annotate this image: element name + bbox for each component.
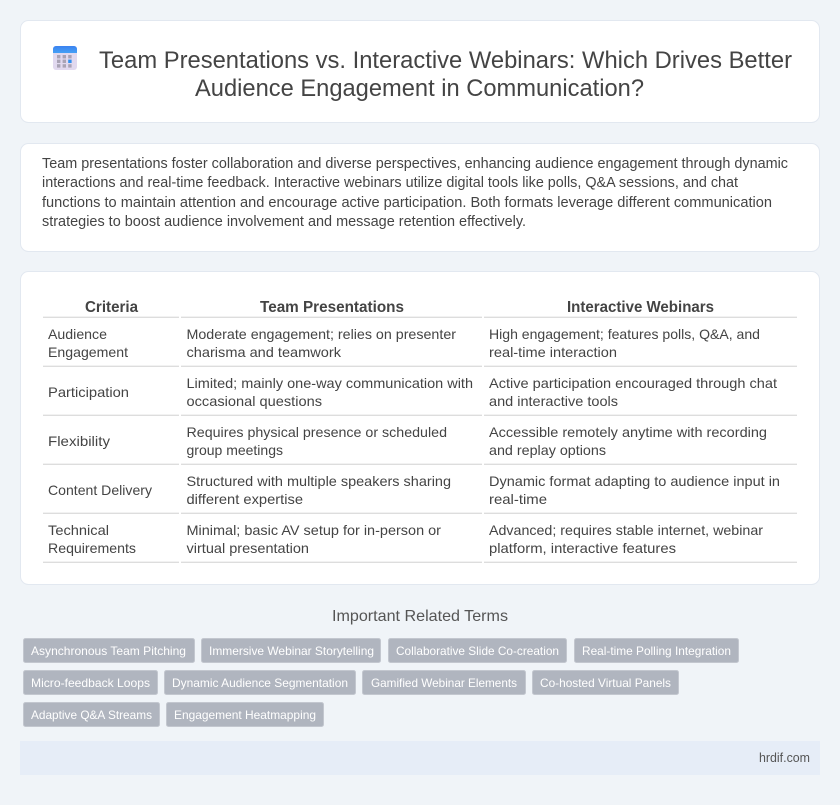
intro paragraph: strategies to boost audience involvement and message retention effectively. xyxy=(42,214,526,230)
row: audience engagement: charisma and teamwork xyxy=(186,344,342,360)
table header row: Team Presentations xyxy=(260,299,404,316)
row: content delivery: real-time xyxy=(489,491,547,507)
panel: title header xyxy=(20,20,820,122)
tag: Gamified Webinar Elements: Gamified Webinar Elements xyxy=(371,676,517,690)
row: technical requirements: Technical xyxy=(48,522,109,538)
tag: Adaptive Q&A Streams: Adaptive Q&A Streams xyxy=(31,708,152,722)
row: audience engagement: Moderate engagement; relies on presenter xyxy=(186,326,456,342)
row: participation: Active participation encouraged through chat xyxy=(489,375,777,391)
row: audience engagement xyxy=(48,326,760,360)
tag: Asynchronous Team Pitching xyxy=(24,638,194,662)
row: technical requirements: Advanced; requires stable internet, webinar xyxy=(489,522,763,538)
row: flexibility: group meetings xyxy=(186,442,283,458)
row: participation xyxy=(48,375,777,409)
row: audience engagement: real-time interaction xyxy=(489,344,617,360)
tag: Adaptive Q&A Streams xyxy=(24,702,160,726)
tag: Dynamic Audience Segmentation: Dynamic Audience Segmentation xyxy=(172,676,348,690)
row: participation: Participation xyxy=(48,384,129,400)
tag: Collaborative Slide Co-creation xyxy=(388,638,566,662)
row: audience engagement: High engagement; features polls, Q&A, and xyxy=(489,326,760,342)
tag: Real-time Polling Integration: Real-time Polling Integration xyxy=(582,644,731,658)
row: flexibility: Requires physical presence or scheduled xyxy=(186,424,447,440)
tag: Engagement Heatmapping: Engagement Heatmapping xyxy=(174,708,316,722)
table header row: Criteria xyxy=(85,299,138,316)
tag: Asynchronous Team Pitching: Asynchronous Team Pitching xyxy=(31,644,186,658)
tag: Immersive Webinar Storytelling xyxy=(202,638,380,662)
tag: Micro-feedback Loops xyxy=(24,670,158,694)
row: technical requirements: Requirements xyxy=(48,540,136,556)
row: participation: occasional questions xyxy=(186,393,322,409)
row: technical requirements: virtual presentation xyxy=(186,540,309,556)
tag: Micro-feedback Loops: Micro-feedback Loops xyxy=(31,676,150,690)
row: content delivery: Structured with multiple speakers sharing xyxy=(186,473,451,489)
intro paragraph xyxy=(42,156,788,230)
tag: Co-hosted Virtual Panels xyxy=(532,670,678,694)
row: content delivery: different expertise xyxy=(186,491,303,507)
title: Team Presentations vs. Interactive Webinars: Which Drives Better xyxy=(99,47,792,74)
tag: Engagement Heatmapping xyxy=(166,702,324,726)
tag: Dynamic Audience Segmentation xyxy=(164,670,356,694)
table header row xyxy=(85,299,714,316)
row: content delivery xyxy=(48,473,780,507)
tag: Real-time Polling Integration xyxy=(574,638,738,662)
panel: introduction xyxy=(20,144,820,252)
tag: Immersive Webinar Storytelling: Immersive Webinar Storytelling xyxy=(209,644,374,658)
row: participation: Limited; mainly one-way communication with xyxy=(186,375,473,391)
row: content delivery: Content Delivery xyxy=(48,482,152,498)
panel: comparison table xyxy=(20,272,820,584)
row: participation: and interactive tools xyxy=(489,393,618,409)
tag: Co-hosted Virtual Panels: Co-hosted Virtual Panels xyxy=(540,676,671,690)
row: flexibility: and replay options xyxy=(489,442,606,458)
tag: Gamified Webinar Elements xyxy=(362,670,526,694)
row: flexibility: Flexibility xyxy=(48,433,110,449)
row: technical requirements: Minimal; basic AV setup for in-person or xyxy=(186,522,441,538)
row: flexibility: Accessible remotely anytime with recording xyxy=(489,424,767,440)
row: technical requirements xyxy=(48,522,763,556)
footer: hrdif.com xyxy=(759,750,810,765)
heading: important related terms: Important Related Terms xyxy=(332,608,508,625)
row: flexibility xyxy=(48,424,767,458)
panel: related terms xyxy=(24,608,738,726)
footer xyxy=(20,741,820,775)
row: audience engagement: Engagement xyxy=(48,344,128,360)
title: Audience Engagement in Communication? xyxy=(195,75,644,102)
tag: Collaborative Slide Co-creation: Collaborative Slide Co-creation xyxy=(396,644,559,658)
intro paragraph: functions to maintain attention and encourage active participation. Both formats leverage different communication xyxy=(42,195,772,211)
title xyxy=(99,47,792,102)
row: content delivery: Dynamic format adapting to audience input in xyxy=(489,473,780,489)
row: audience engagement: Audience xyxy=(48,326,107,342)
intro paragraph: interactions and real-time feedback. Interactive webinars utilize digital tools like polls, Q&A sessions, and chat xyxy=(42,175,738,191)
intro paragraph: Team presentations foster collaboration and diverse perspectives, enhancing audience engagement through dynamic xyxy=(42,156,788,172)
table header row: Interactive Webinars xyxy=(567,299,714,316)
row: technical requirements: platform, interactive features xyxy=(489,540,676,556)
icon: calendar xyxy=(53,46,77,70)
